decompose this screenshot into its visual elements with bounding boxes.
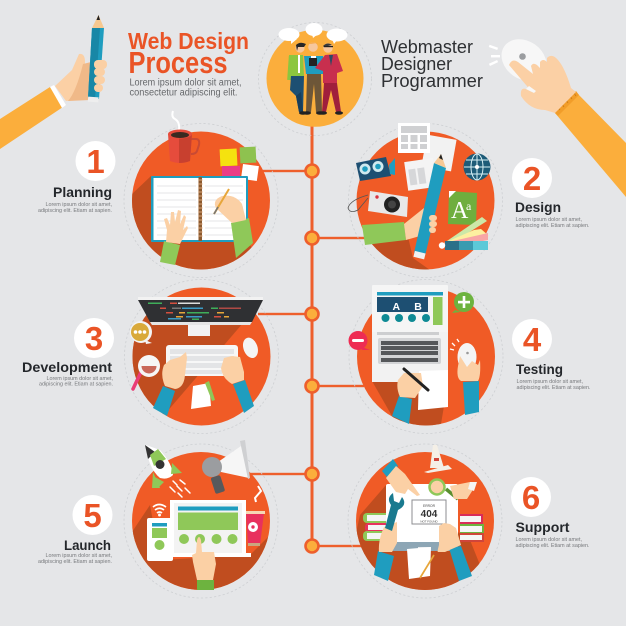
step 6 label block: [511, 477, 590, 549]
icon: magnifier: [430, 480, 477, 499]
title: Lorem ipsum dolor sit amet,: [130, 78, 242, 88]
title: Process: [128, 45, 228, 80]
icon: sticky notes: [220, 147, 259, 181]
icon: photo camera: [348, 191, 408, 217]
step 3 label block: Development: [22, 359, 112, 375]
roles text: Designer: [381, 53, 452, 74]
icon: typography card: a: [466, 199, 472, 213]
panel: step 1 planning: [124, 110, 278, 278]
icon: colour swatch fan: [439, 217, 489, 250]
hand tap: [192, 537, 216, 590]
step 6 label block: Support: [516, 519, 570, 535]
icon: traffic cone: [424, 445, 452, 473]
person: green shirt: [287, 43, 307, 115]
title: consectetur adipiscing elit.: [130, 88, 238, 98]
icon: globe: [464, 154, 490, 180]
icon: laptop 404: [386, 484, 458, 551]
step 4 label block: [512, 319, 591, 391]
speech bubbles: [278, 23, 348, 44]
icon: typography card: A: [451, 198, 469, 224]
step 1 label block: Planning: [53, 184, 112, 200]
step 2 label block: adipiscing elit. Etiam at sapien.: [516, 223, 590, 229]
step 1 label block: [38, 141, 116, 214]
step 3 label block: [22, 318, 114, 388]
step 4 label block: 4: [523, 321, 542, 358]
icon: chat bubble: [130, 321, 152, 344]
right hand with pencil: [214, 189, 253, 258]
icon: typography card: [448, 191, 477, 225]
step 5 label block: adipiscing elit. Etiam at sapien.: [38, 559, 112, 565]
icon: laptop 404: ERROR: [423, 504, 436, 508]
title: Web Design: [128, 28, 249, 54]
panel: step 6 support: [348, 444, 502, 600]
step 5 label block: 5: [83, 497, 102, 534]
hands typing: [153, 352, 254, 416]
step 2 label block: 2: [523, 160, 541, 197]
icon: rocket: [145, 445, 190, 497]
roles text: [381, 36, 483, 91]
panel: step 4 testing: [348, 280, 503, 434]
step 4 label block: adipiscing elit. Etiam at sapien.: [516, 385, 591, 391]
roles text: Programmer: [381, 70, 483, 91]
step 4 label block: Testing: [516, 361, 563, 377]
step 6 label block: Lorem ipsum dolor sit amet,: [516, 537, 583, 543]
icon: phone: [147, 518, 173, 561]
step 4 label block: Lorem ipsum dolor sit amet,: [516, 379, 584, 385]
left hand writing pad: [160, 210, 188, 265]
panel: step 2 design: [348, 123, 502, 285]
step 5 label block: Launch: [64, 537, 111, 553]
big pencil and hand: [362, 154, 446, 259]
hand pointing: [382, 459, 420, 496]
notebook: [151, 176, 248, 242]
icon: coffee mug: [168, 111, 199, 163]
icon: laptop 404: NOT FOUND: [420, 520, 438, 524]
panel: step 3 development: [124, 280, 278, 434]
panel: step 5 launch: [124, 440, 278, 600]
wireframe cards: [398, 123, 457, 191]
icon: plus bubble: [452, 292, 474, 313]
step 5 label block: [38, 495, 112, 565]
icon: hand on mouse: [450, 339, 480, 415]
title: [128, 28, 249, 98]
icon: keyboard: [166, 345, 238, 376]
icon: laptop: [372, 285, 448, 382]
icon: drink cup: [245, 486, 265, 546]
step 3 label block: Lorem ipsum dolor sit amet,: [46, 376, 113, 382]
step 2 label block: Lorem ipsum dolor sit amet,: [516, 217, 583, 223]
timeline connector: [250, 125, 368, 552]
step 2 label block: Design: [515, 199, 561, 215]
step 3 label block: 3: [85, 320, 103, 357]
icon: laptop 404: 404: [421, 509, 438, 520]
icon: minus bubble: [348, 331, 370, 350]
hand with wrench: [374, 493, 404, 581]
person: red suit: [315, 43, 343, 115]
roles text: Webmaster: [381, 36, 473, 57]
step 3 label block: adipiscing elit. Etiam at sapien.: [39, 382, 113, 388]
step 6 label block: adipiscing elit. Etiam at sapien.: [516, 543, 590, 549]
icon: mouse: [240, 336, 261, 360]
person: blue shirt: [303, 42, 324, 115]
icon: laptop: A: [392, 301, 400, 313]
icon: books: [363, 513, 484, 542]
hand holding pencil: [0, 15, 107, 149]
step 1 label block: 1: [86, 143, 105, 180]
note and pencil: [191, 381, 215, 409]
icon: wifi: [153, 504, 166, 516]
step 1 label block: adipiscing elit. Etiam at sapien.: [38, 208, 112, 214]
note and pen: [407, 547, 434, 579]
icon: desktop monitor: [138, 297, 263, 336]
step 1 label block: Lorem ipsum dolor sit amet,: [45, 202, 112, 208]
step 2 label block: [512, 158, 590, 229]
icon: megaphone: [202, 440, 250, 494]
icon: laptop: B: [414, 301, 422, 313]
step 5 label block: Lorem ipsum dolor sit amet,: [45, 553, 112, 559]
icon: magnifier: [133, 355, 160, 389]
hand on laptop: [438, 523, 472, 581]
icon: tablet: [170, 500, 251, 557]
hand on mouse: [489, 31, 626, 197]
panel: team: [258, 22, 372, 136]
icon: video camera: [356, 157, 395, 181]
hand with pen: [392, 369, 428, 424]
notepad: [418, 370, 448, 410]
step 6 label block: 6: [522, 479, 540, 516]
